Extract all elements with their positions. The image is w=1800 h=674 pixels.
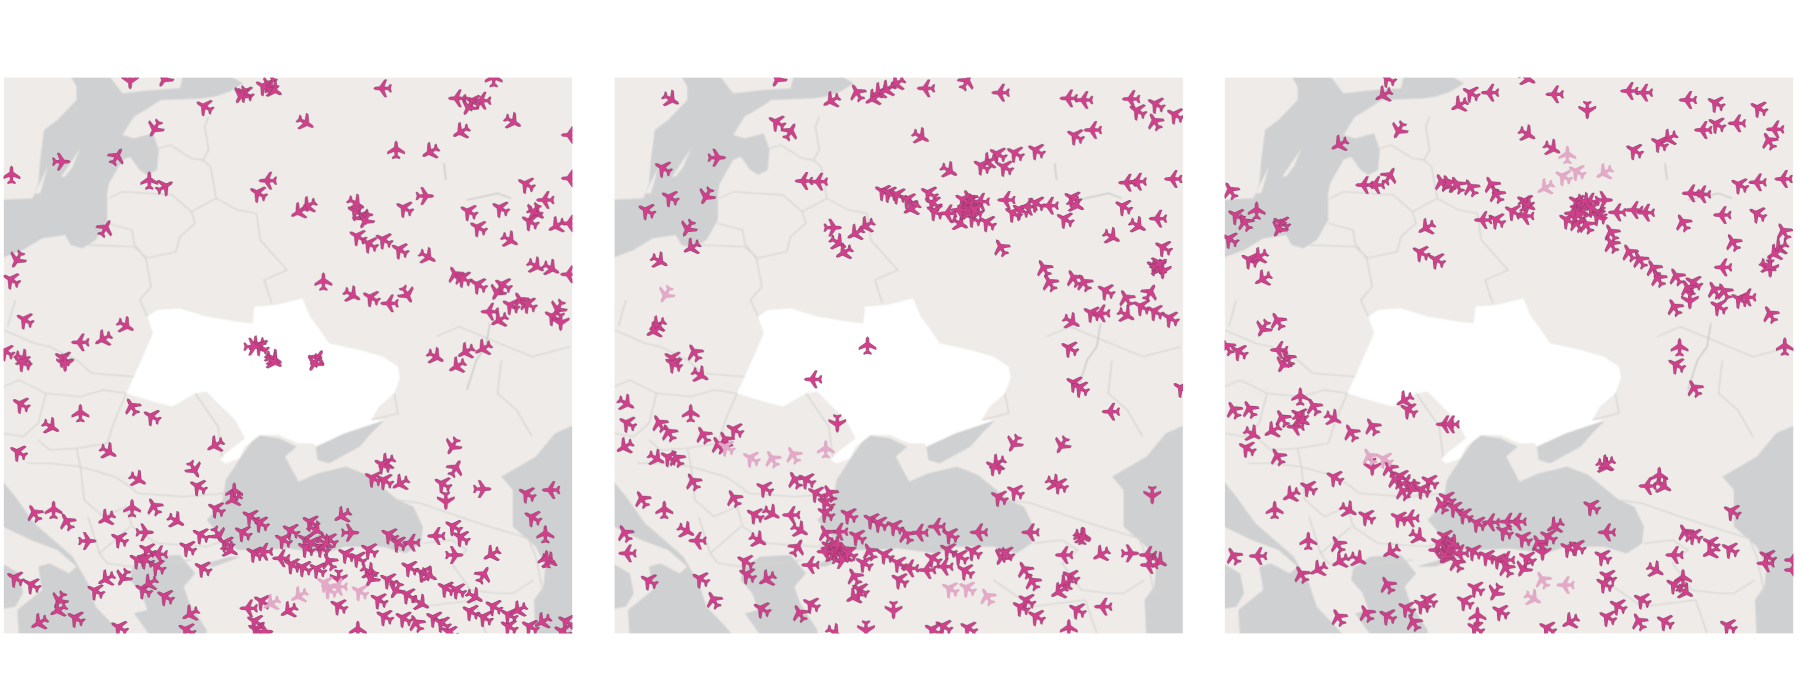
base map 2 bbox=[607, 70, 1189, 640]
faded aircraft markers 2 bbox=[654, 282, 999, 609]
panel: map 1 bbox=[0, 66, 579, 645]
aircraft markers 2 bbox=[613, 66, 1194, 645]
aircraft markers 1 bbox=[0, 66, 579, 645]
base map 1 bbox=[0, 70, 578, 640]
base map 3 bbox=[1217, 70, 1799, 640]
aircraft markers 3 bbox=[1215, 66, 1800, 640]
panel: map 2 bbox=[607, 66, 1194, 645]
faded aircraft markers 1 bbox=[264, 576, 370, 610]
panel: map 3 bbox=[1215, 66, 1800, 640]
faded aircraft markers 3 bbox=[1357, 146, 1616, 610]
